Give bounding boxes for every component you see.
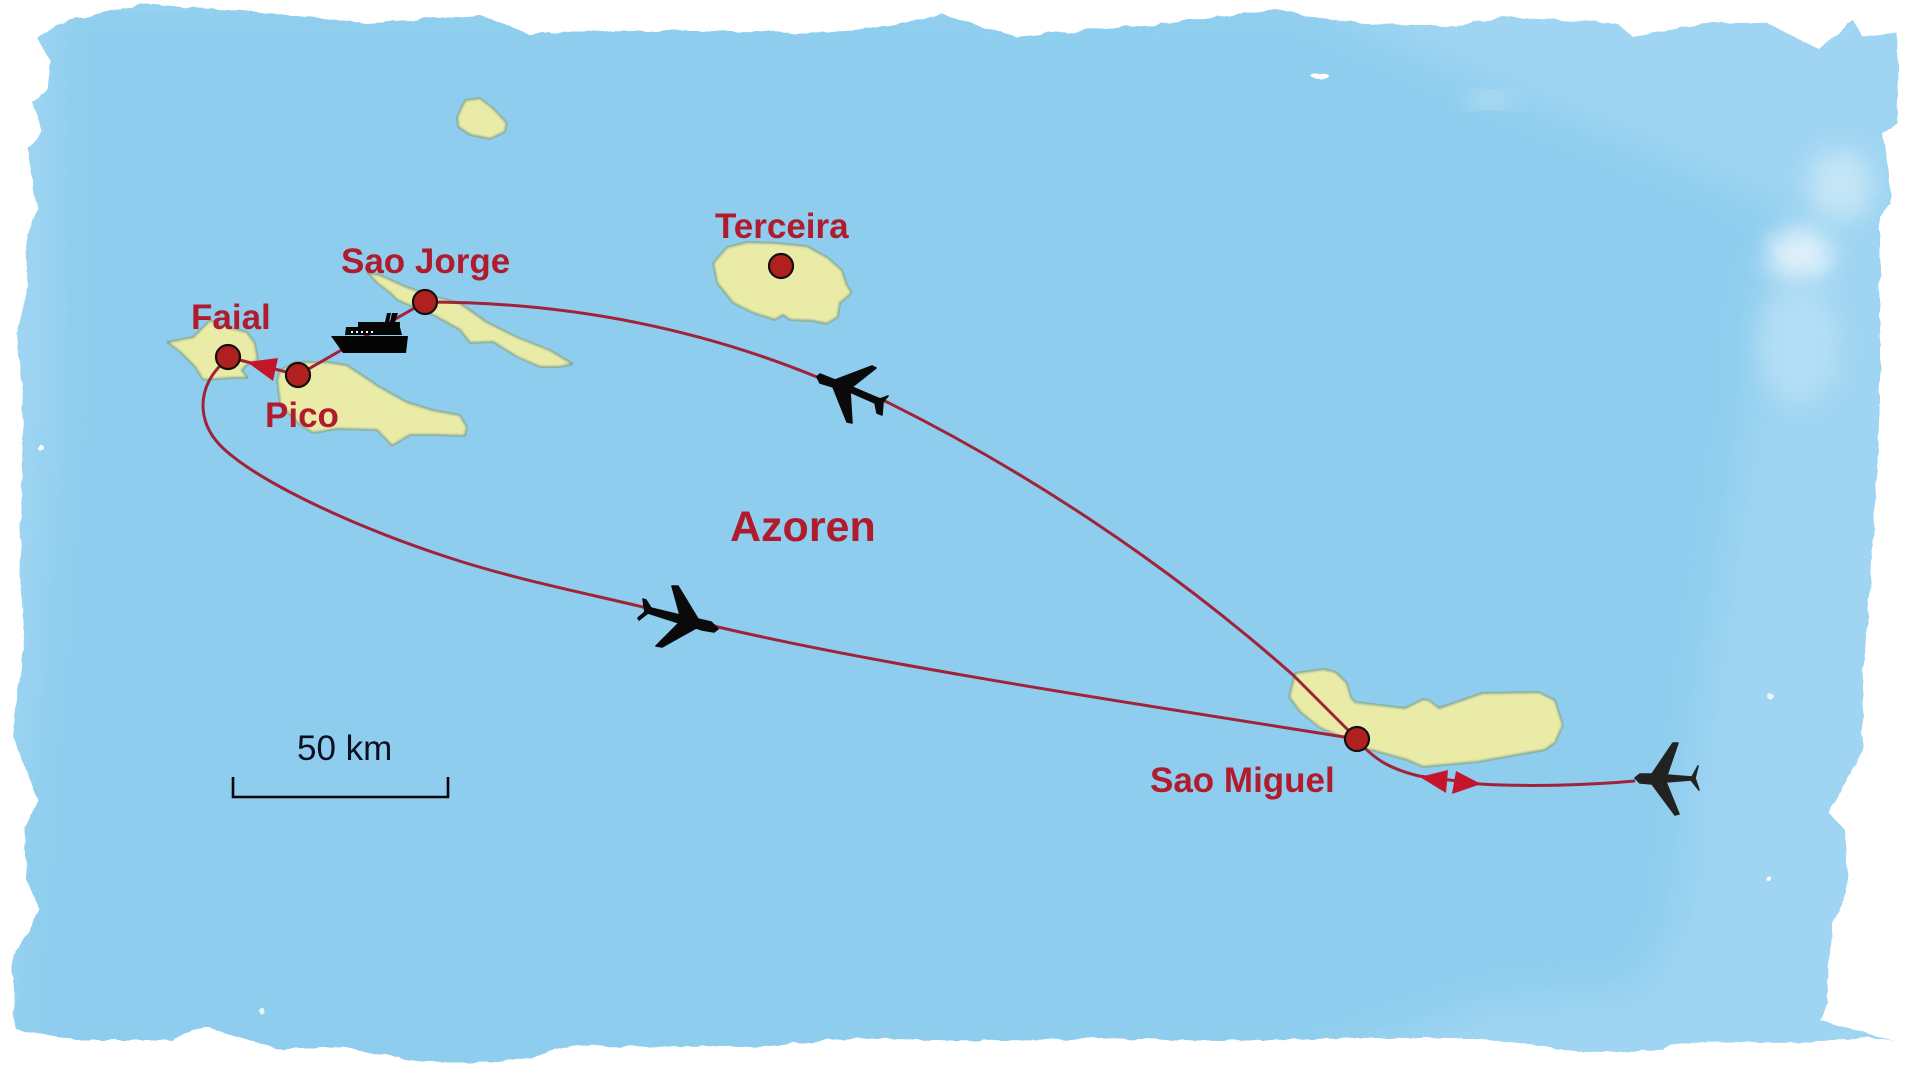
arrow: departure from Sao Miguel (1452, 771, 1481, 794)
title: Azoren: Azoren (730, 503, 876, 551)
icon: airplane over the southern route (638, 586, 718, 647)
label: Faial: Faial (191, 298, 271, 337)
island: Terceira (713, 242, 852, 324)
icon: airplane over the northern route (817, 366, 888, 423)
stop: Sao Miguel (1345, 727, 1369, 751)
island: Sao Miguel (1289, 669, 1563, 767)
stop: Terceira (769, 254, 793, 278)
stop: Faial (216, 345, 240, 369)
route: ferry Faial, Pico, Sao Jorge (228, 302, 425, 375)
arrow: arrival at Sao Miguel (1420, 770, 1448, 793)
label: Terceira: Terceira (715, 207, 849, 246)
icon: airplane east of Sao Miguel (1635, 743, 1699, 815)
label: Pico: Pico (265, 396, 339, 435)
island: Graciosa (457, 98, 507, 139)
route: Sao Miguel to Faial by air (203, 357, 1357, 739)
island: Pico (277, 362, 467, 446)
stop: Sao Jorge (413, 290, 437, 314)
arrow: Pico to Faial (247, 358, 278, 381)
label: Sao Miguel: Sao Miguel (1150, 761, 1335, 800)
scale bar: 50 km (233, 729, 448, 797)
island: Faial (167, 320, 258, 380)
label: Sao Jorge: Sao Jorge (341, 242, 510, 281)
stop: Pico (286, 363, 310, 387)
route: Sao Jorge to Sao Miguel by air (425, 302, 1357, 739)
route: arrival and departure at Sao Miguel (1357, 739, 1635, 785)
scale bar: 50 km: 50 km (297, 729, 392, 768)
icon: ferry ship (331, 313, 408, 353)
island: Sao Jorge (367, 272, 573, 367)
